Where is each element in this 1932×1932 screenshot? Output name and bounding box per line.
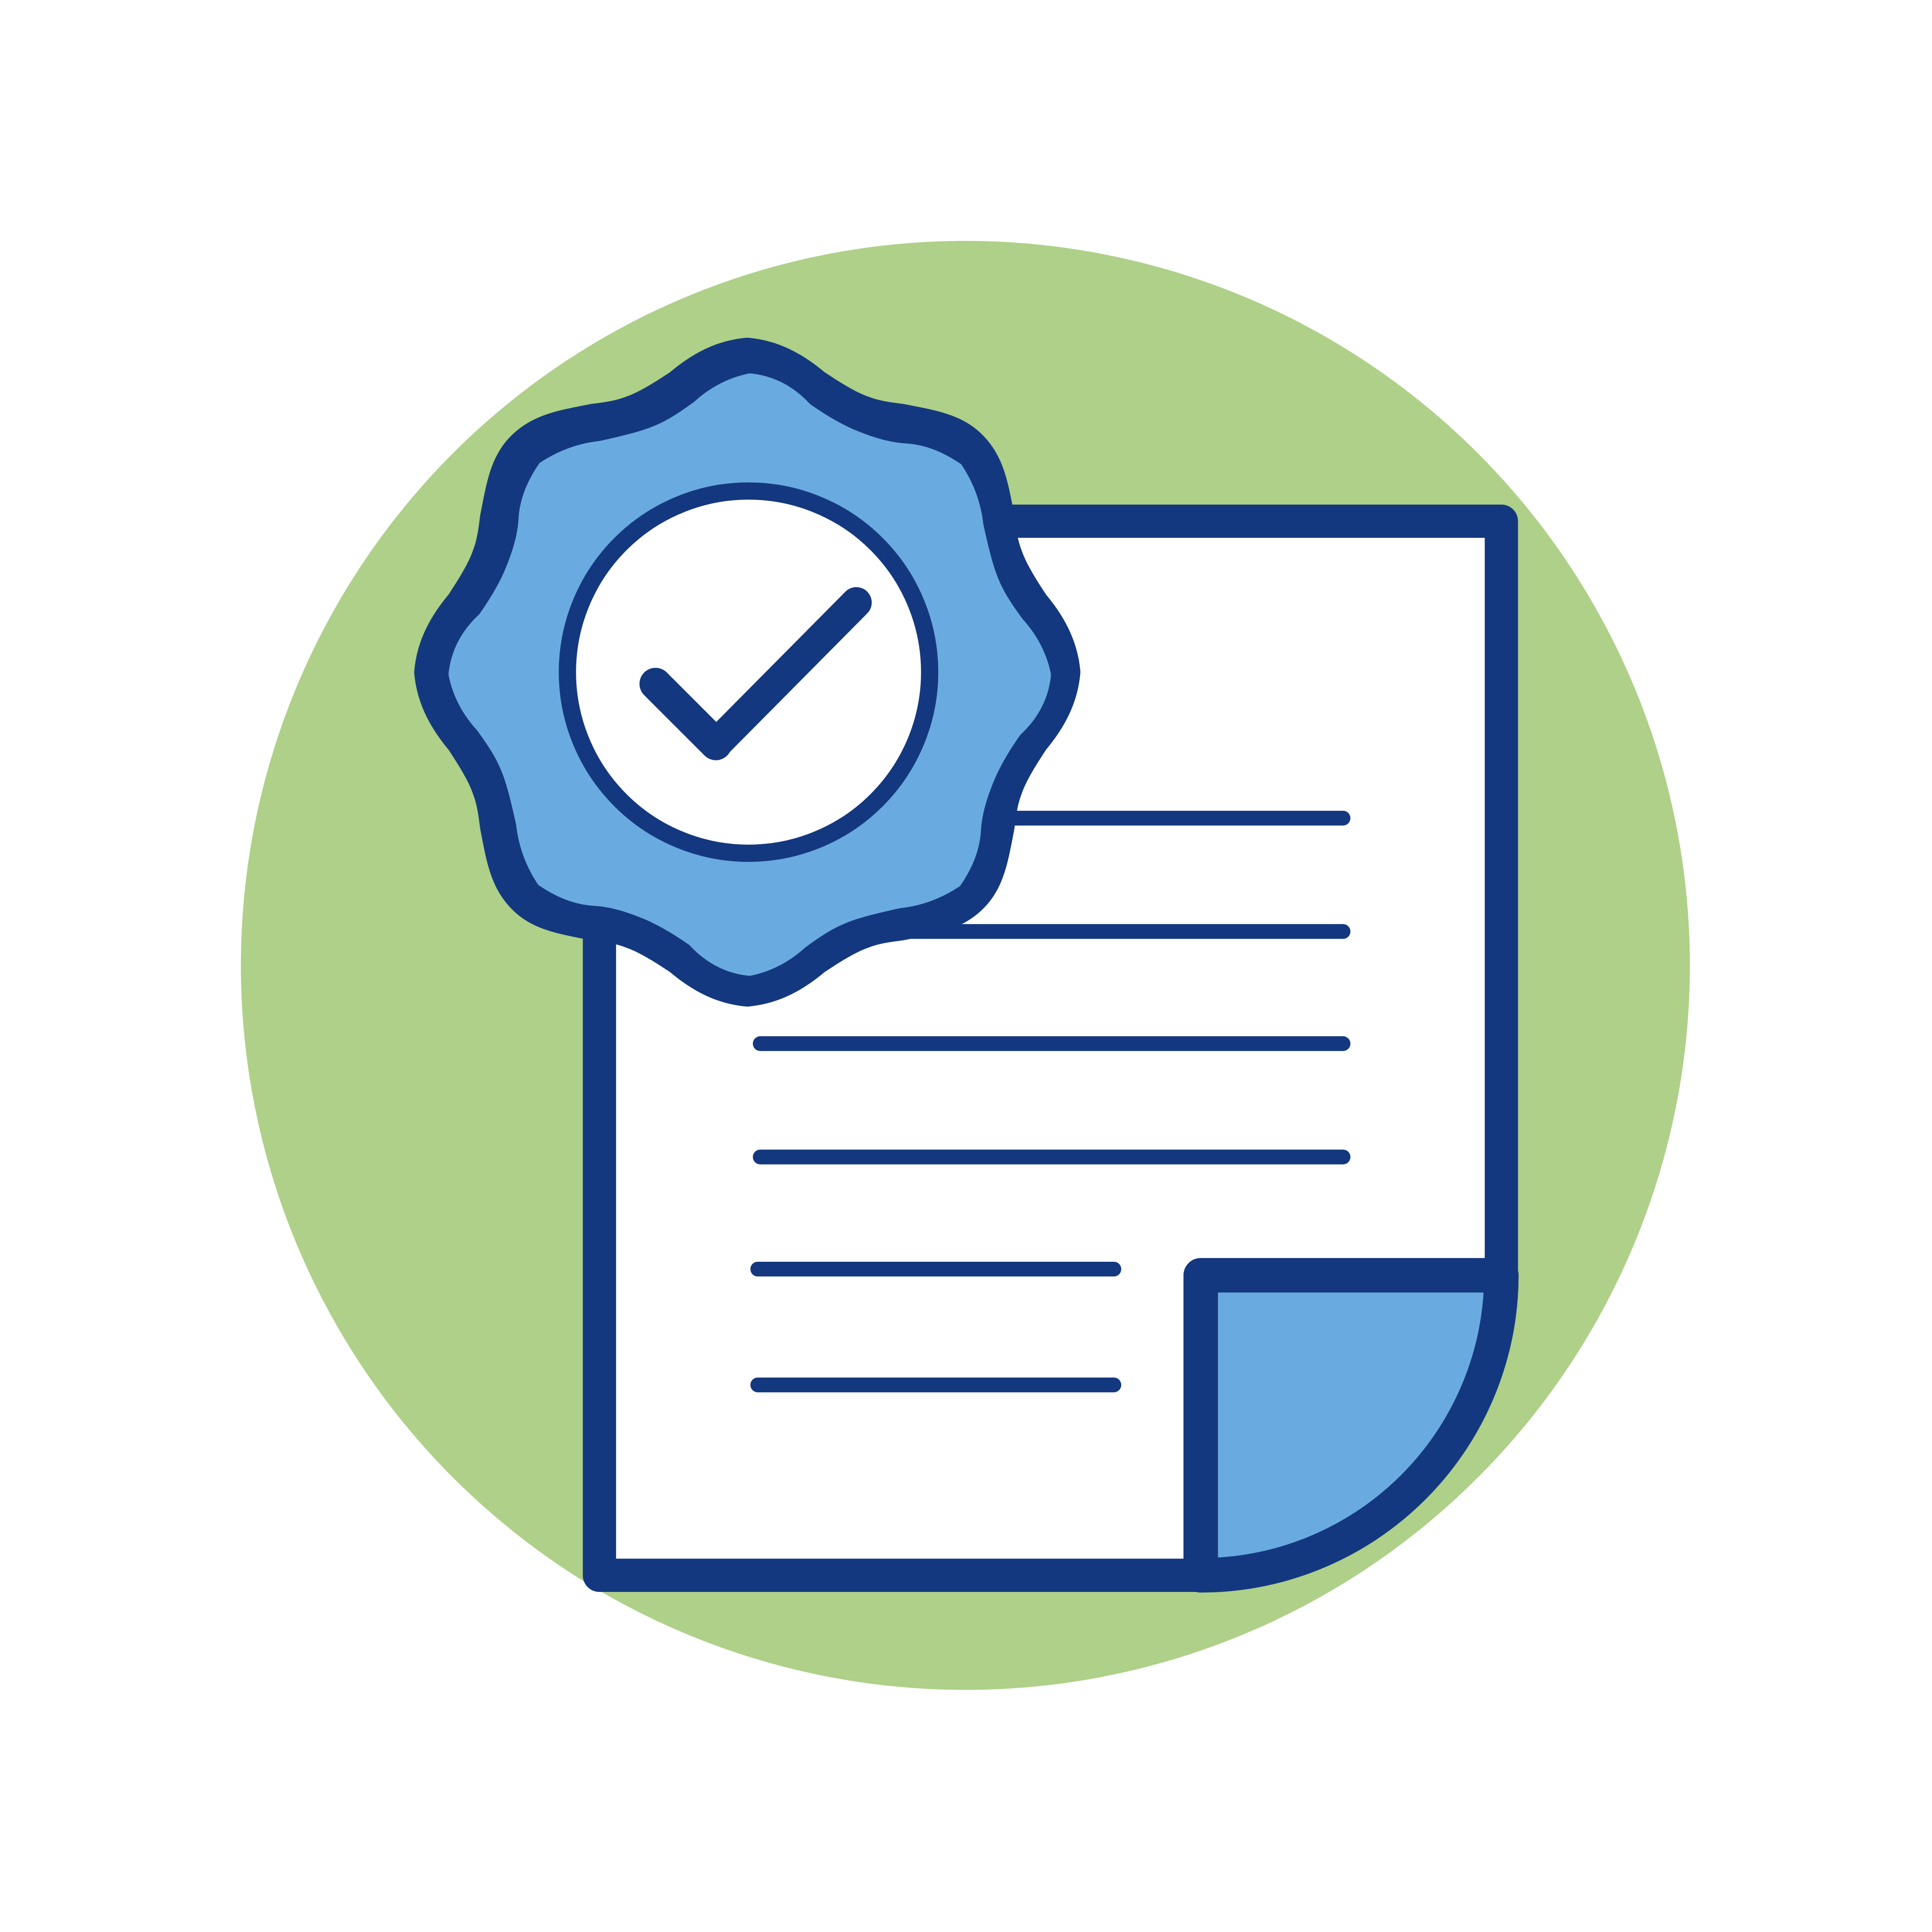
folded page corner [1201, 1275, 1501, 1575]
text lines [758, 818, 1343, 1385]
badge outer edge [414, 338, 1081, 1007]
badge white circle [567, 491, 930, 853]
icon: check mark [656, 602, 857, 744]
document [600, 521, 1501, 1575]
background green circle [241, 241, 1690, 1690]
certification seal badge [414, 338, 1081, 1007]
badge blue fill [449, 373, 1051, 976]
document page [600, 521, 1501, 1575]
